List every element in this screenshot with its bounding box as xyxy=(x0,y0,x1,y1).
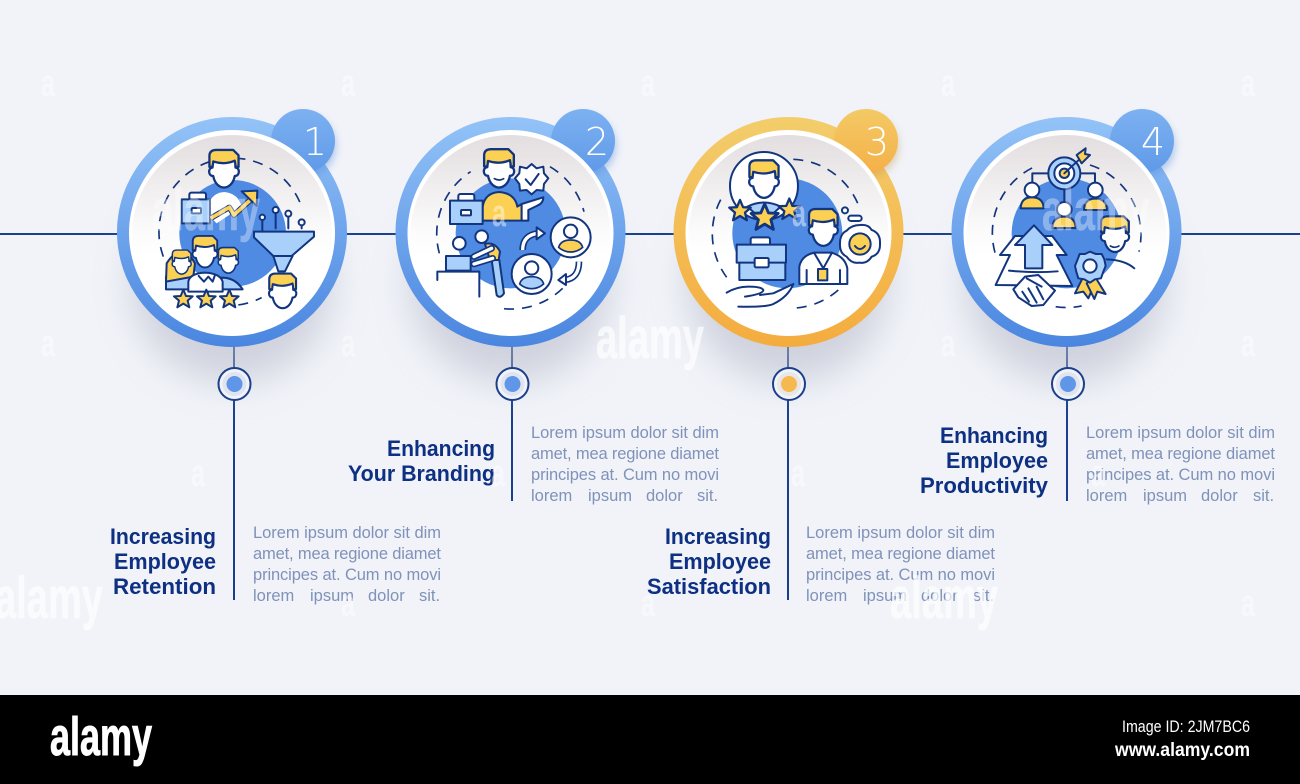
text block: step 4: Lorem ipsum dolor sit dim xyxy=(1086,424,1275,442)
badge 3 xyxy=(834,109,899,177)
step 3 circle xyxy=(674,109,904,382)
watermarks: a xyxy=(1241,583,1256,625)
icon: productivity xyxy=(992,148,1141,307)
footer bar xyxy=(0,695,1300,784)
watermarks: a xyxy=(341,323,356,365)
heading: step 2: Enhancing xyxy=(387,436,495,461)
text block: step 4: ipsum xyxy=(1143,487,1187,505)
text block: step 4: lorem xyxy=(1086,487,1127,505)
text block: step 4: principes at. Cum no movi xyxy=(1086,466,1275,484)
timeline horizontal line xyxy=(0,233,1300,235)
node 3 xyxy=(773,368,805,400)
watermarks: alamy xyxy=(1042,178,1150,243)
heading: step 4 xyxy=(920,423,1049,498)
text block: step 1: Lorem ipsum dolor sit dim xyxy=(253,524,441,542)
text block: step 3: principes at. Cum no movi xyxy=(806,566,995,584)
heading: step 2 xyxy=(348,436,495,486)
step 2 circle xyxy=(396,109,626,382)
watermarks: a xyxy=(41,323,56,365)
badge 2: 2 xyxy=(585,120,609,164)
text block: step 4: sit. xyxy=(1253,487,1274,505)
text block: step 2: Lorem ipsum dolor sit dim xyxy=(531,424,719,442)
step 4 circle xyxy=(952,109,1182,382)
watermarks: a xyxy=(491,453,506,495)
watermarks xyxy=(0,63,1256,631)
watermarks: a xyxy=(941,63,956,105)
text block: step 3: lorem xyxy=(806,587,847,605)
text block: step 1: dolor xyxy=(368,587,405,605)
badge 2 xyxy=(551,109,616,177)
heading: step 3: Employee xyxy=(669,549,771,574)
watermarks: a xyxy=(191,453,206,495)
user 1 xyxy=(551,217,591,257)
website: www.alamy.com xyxy=(1114,740,1250,761)
text block: step 4 xyxy=(1086,424,1275,505)
node 1 xyxy=(218,368,250,400)
text block: step 2: lorem xyxy=(531,487,572,505)
heading: step 4: Productivity xyxy=(920,473,1049,498)
text block: step 2: sit. xyxy=(697,487,718,505)
watermarks: a xyxy=(1091,453,1106,495)
watermarks: a xyxy=(1241,323,1256,365)
badge 1 xyxy=(271,109,336,177)
heading: step 3 xyxy=(647,524,771,599)
watermarks: a xyxy=(791,453,806,495)
text block: step 1 xyxy=(253,524,441,605)
watermarks: a xyxy=(792,193,807,235)
text block: step 2: ipsum xyxy=(588,487,632,505)
logo: alamy xyxy=(50,707,152,767)
watermarks: alamy xyxy=(152,178,260,243)
heading: step 4: Employee xyxy=(946,448,1048,473)
text block: step 2: amet, mea regione diamet xyxy=(531,445,719,463)
badge 4 xyxy=(1110,109,1175,177)
heading: step 3: Increasing xyxy=(665,524,771,549)
watermarks: a xyxy=(341,583,356,625)
text block: step 3 xyxy=(806,524,995,605)
watermarks: a xyxy=(1241,63,1256,105)
heading: step 4: Enhancing xyxy=(940,423,1048,448)
watermarks: a xyxy=(641,583,656,625)
watermarks: a xyxy=(941,323,956,365)
heading: step 3: Satisfaction xyxy=(647,574,771,599)
badge 4: 4 xyxy=(1141,120,1165,164)
text block: step 4: amet, mea regione diamet xyxy=(1086,445,1275,463)
text block: step 1: principes at. Cum no movi xyxy=(253,566,441,584)
heading: step 1: Retention xyxy=(113,574,216,599)
heading: step 1: Employee xyxy=(114,549,216,574)
heading: step 1: Increasing xyxy=(110,524,216,549)
text block: step 2 xyxy=(531,424,719,505)
text block: step 2: dolor xyxy=(646,487,683,505)
node 4 xyxy=(1052,368,1084,400)
image id: Image ID: 2JM7BC6 xyxy=(1122,717,1250,736)
watermarks: a xyxy=(41,63,56,105)
text block: step 4: dolor xyxy=(1201,487,1238,505)
text block: step 3: dolor xyxy=(921,587,958,605)
badge 3: 3 xyxy=(865,120,889,164)
heading: step 1 xyxy=(110,524,216,599)
text block: step 3: sit. xyxy=(973,587,994,605)
icon: branding xyxy=(437,149,591,309)
text block: step 2: principes at. Cum no movi xyxy=(531,466,719,484)
icon: employee retention xyxy=(159,150,314,308)
text block: step 1: ipsum xyxy=(310,587,354,605)
text block: step 1: amet, mea regione diamet xyxy=(253,545,441,563)
watermarks: alamy xyxy=(596,306,704,371)
watermarks: alamy xyxy=(890,566,998,631)
watermarks: a xyxy=(341,63,356,105)
icon: satisfaction xyxy=(712,152,880,308)
watermarks: a xyxy=(492,193,507,235)
watermarks: a xyxy=(641,63,656,105)
step 1 circle xyxy=(117,109,347,382)
connector lines xyxy=(233,345,1068,600)
text block: step 3: amet, mea regione diamet xyxy=(806,545,995,563)
text block: step 3: ipsum xyxy=(863,587,907,605)
text block: step 1: sit. xyxy=(419,587,440,605)
user 2 xyxy=(512,254,552,294)
text block: step 1: lorem xyxy=(253,587,294,605)
text block: step 3: Lorem ipsum dolor sit dim xyxy=(806,524,995,542)
heading: step 2: Your Branding xyxy=(348,461,495,486)
node 2 xyxy=(496,368,528,400)
badge 1: 1 xyxy=(303,120,327,164)
